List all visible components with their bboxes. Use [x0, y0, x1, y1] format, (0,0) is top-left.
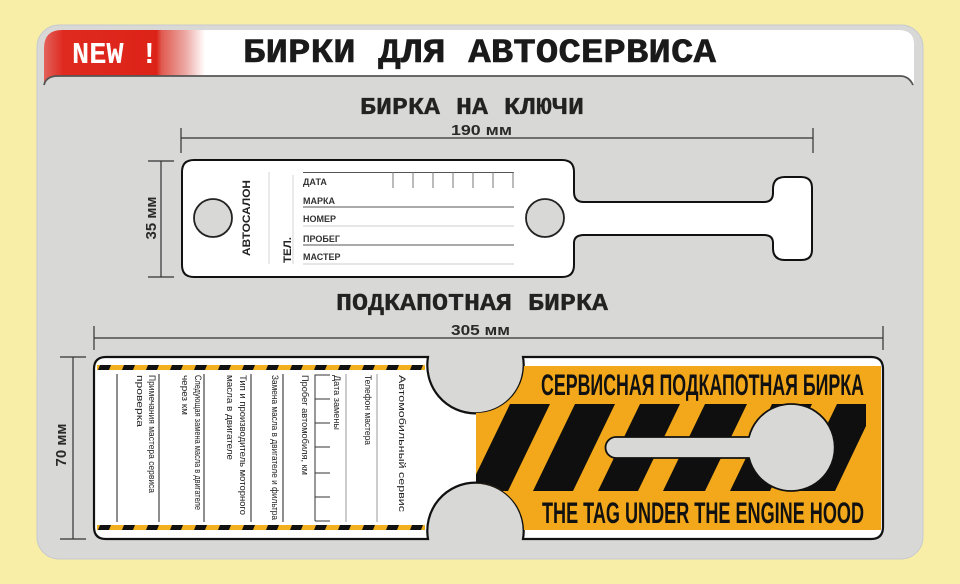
dimension: 35 mm: 35 мм — [143, 196, 160, 240]
orange section — [468, 366, 881, 530]
phone label: ТЕЛ. — [282, 237, 294, 263]
underhood tag — [94, 357, 883, 539]
dimension: 305 mm: 305 мм — [451, 322, 510, 339]
header band — [44, 30, 914, 85]
hazard strip bottom — [97, 525, 425, 530]
date ruler — [315, 375, 330, 521]
key tag — [182, 160, 812, 277]
form columns: проверка — [135, 375, 145, 427]
form fields: МАСТЕР — [303, 252, 341, 262]
form fields: ПРОБЕГ — [303, 234, 340, 244]
form columns: Дата замены — [332, 375, 342, 430]
form columns: Пробег автомобиля, км — [300, 375, 310, 475]
form fields: МАРКА — [303, 196, 335, 206]
dimension: 190 mm — [181, 122, 813, 153]
new badge: NEW ! — [72, 38, 158, 73]
tag outline — [182, 160, 812, 277]
right hole — [526, 199, 564, 237]
dimension: 35 mm — [143, 161, 174, 277]
dealer label: АВТОСАЛОН — [241, 180, 253, 256]
hazard strip top — [97, 365, 425, 370]
dimension: 190 mm: 190 мм — [451, 122, 512, 139]
form columns: Тип и производитель моторного — [238, 375, 248, 515]
form columns: через км — [180, 375, 190, 415]
hazard stripes — [468, 404, 866, 491]
form fields: ДАТА — [303, 177, 327, 187]
form fields — [303, 172, 514, 264]
title: БИРКИ ДЛЯ АВТОСЕРВИСА — [243, 35, 717, 73]
form columns — [117, 374, 407, 522]
heading: key tag: БИРКА НА КЛЮЧИ — [360, 95, 584, 122]
new badge — [44, 30, 205, 85]
dimension: 70 mm: 70 мм — [53, 423, 70, 467]
dimension: 70 mm — [53, 357, 86, 539]
form columns: Примечания мастера сервиса — [147, 375, 157, 493]
form columns: Следующая замена масла в двигателе — [193, 375, 203, 510]
tag outline — [94, 357, 883, 539]
left hole — [194, 199, 232, 237]
form columns: Замена масла в двигателе и фильтра — [270, 375, 280, 520]
dimension: 305 mm — [94, 322, 883, 350]
form columns: Телефон мастера — [363, 375, 373, 445]
form columns: масла в двигателе — [225, 375, 235, 460]
keyhole slot — [606, 404, 835, 491]
heading: underhood tag: ПОДКАПОТНАЯ БИРКА — [336, 291, 609, 318]
form fields: НОМЕР — [303, 214, 336, 224]
form columns: Автомобильный сервис — [397, 375, 407, 513]
